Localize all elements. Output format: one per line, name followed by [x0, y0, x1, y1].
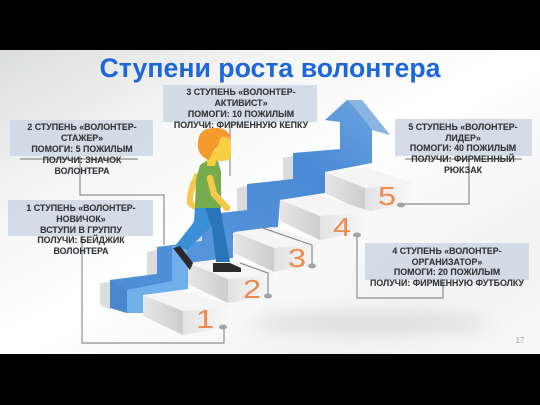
- slide background: [0, 50, 540, 354]
- box 5: leader: [395, 119, 532, 175]
- connector lines: [20, 122, 522, 343]
- box 3: activist: [163, 85, 317, 130]
- box 5: leader: ПОЛУЧИ: ФИРМЕННЫЙ: [411, 153, 515, 164]
- box 2: trainee: 2 СТУПЕНЬ «ВОЛОНТЕР-: [27, 122, 137, 132]
- box 1: newcomer: НОВИЧОК»: [56, 214, 106, 224]
- page number: 17: [516, 336, 525, 345]
- front arm: [210, 178, 227, 208]
- step numbers: 2: [243, 275, 261, 304]
- box 1: newcomer: ВОЛОНТЕРА: [53, 246, 109, 256]
- box 2: trainee: СТАЖЕР»: [61, 133, 103, 143]
- riser walls: [100, 156, 293, 310]
- box 4: organiser: 4 СТУПЕНЬ «ВОЛОНТЕР-: [392, 246, 502, 256]
- box 4: organiser: ОРГАНИЗАТОР»: [412, 257, 482, 267]
- box 2: trainee: ПОМОГИ: 5 ПОЖИЛЫМ: [31, 144, 133, 154]
- back shoe: [173, 246, 193, 270]
- box 4: organiser: [365, 243, 529, 288]
- step 3: [234, 227, 324, 272]
- step 4: [280, 195, 370, 240]
- box 1: newcomer: 1 СТУПЕНЬ «ВОЛОНТЕР-: [26, 203, 136, 213]
- step numbers: 1: [196, 305, 214, 334]
- torso: [195, 160, 221, 208]
- box 3: activist: ПОМОГИ: 10 ПОЖИЛЫМ: [188, 109, 294, 119]
- box 2: trainee: ВОЛОНТЕРА: [54, 166, 110, 176]
- front leg: [205, 207, 230, 262]
- stair side mass: [183, 180, 412, 336]
- back leg: [175, 207, 215, 250]
- step numbers: 3: [288, 244, 306, 273]
- step 1: [143, 290, 233, 335]
- box 1: newcomer: ПОЛУЧИ: БЕЙДЖИК: [37, 234, 125, 245]
- box 2: trainee: [10, 120, 153, 176]
- step markers: [219, 202, 405, 330]
- blue arrow ribbon: [110, 100, 390, 313]
- step numbers: [196, 182, 396, 334]
- box 5: leader: ПОМОГИ: 40 ПОЖИЛЫМ: [410, 143, 516, 153]
- front shoe: [213, 263, 241, 272]
- step numbers: 4: [333, 213, 351, 242]
- box 5: leader: 5 СТУПЕНЬ «ВОЛОНТЕР-: [408, 122, 518, 132]
- box 4: organiser: ПОМОГИ: 20 ПОЖИЛЫМ: [394, 267, 500, 277]
- box 5: leader: РЮКЗАК: [444, 165, 483, 175]
- face: [207, 138, 231, 166]
- hair: [198, 128, 231, 160]
- box 5: leader: ЛИДЕР»: [445, 133, 481, 143]
- box 2: trainee: ПОЛУЧИ: ЗНАЧОК: [43, 155, 122, 165]
- box 3: activist: АКТИВИСТ»: [214, 98, 268, 108]
- back arm: [190, 176, 197, 207]
- step 2: [188, 258, 278, 303]
- box 1: newcomer: ВСТУПИ В ГРУППУ: [40, 225, 122, 235]
- step numbers: 5: [378, 182, 396, 211]
- box 4: organiser: ПОЛУЧИ: ФИРМЕННУЮ ФУТБОЛКУ: [370, 278, 524, 288]
- step 5: [325, 167, 415, 212]
- box 3: activist: ПОЛУЧИ: ФИРМЕННУЮ КЕПКУ: [174, 120, 309, 130]
- walking person: [173, 128, 241, 272]
- staircase: [143, 167, 415, 335]
- title: Ступени роста волонтера: [100, 53, 442, 83]
- floor shadow: [250, 315, 490, 331]
- box 3: activist: 3 СТУПЕНЬ «ВОЛОНТЕР-: [186, 87, 296, 97]
- box 1: newcomer: [8, 200, 153, 256]
